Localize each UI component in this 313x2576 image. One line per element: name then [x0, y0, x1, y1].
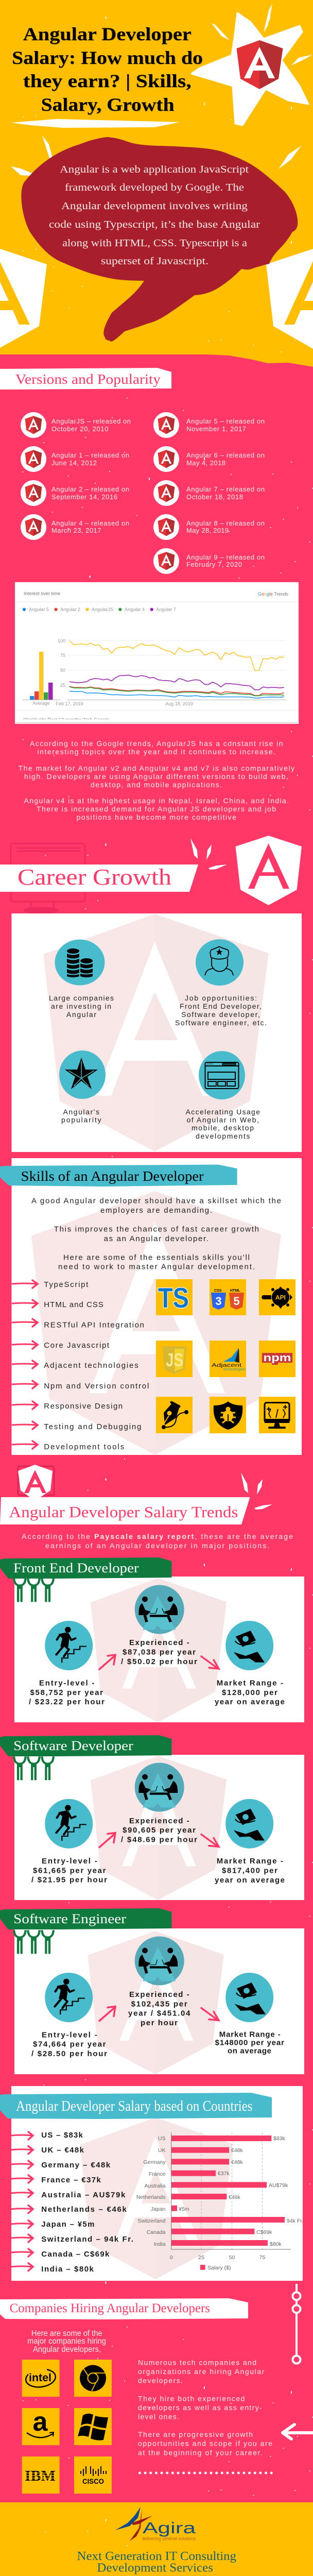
- heading: Versions and Popularity: [0, 368, 171, 389]
- icon tile: pen tool: [156, 1397, 193, 1433]
- text: job opportunities: [175, 994, 267, 1027]
- chart legend: Angular 7: [156, 607, 176, 612]
- chart: salary bars: 25: [198, 2255, 204, 2261]
- text: market range: Market Range -: [217, 1679, 283, 1688]
- chart: Google Trends interest over time: 50: [60, 668, 65, 673]
- icon: coins: [55, 940, 105, 985]
- intro paragraph: along with HTML, CSS. Typescript is a: [62, 238, 247, 249]
- skills intro text: This improves the chances of fast career growth: [54, 1225, 259, 1234]
- chart: Google Trends interest over time: Worldwide Past 12 months Web Search: [24, 717, 109, 723]
- icon: experienced meeting: [135, 1763, 184, 1811]
- panel: skills of an Angular developer: [0, 1158, 302, 1455]
- text: companies description: developers.: [138, 2377, 183, 2385]
- text block: Google trends summary: desktop, and mobile applications.: [91, 781, 222, 789]
- version: Angular 8: [153, 514, 265, 540]
- logo: Agira: Agira: [143, 2519, 196, 2537]
- skills list with arrows: RESTful API Integration: [44, 1321, 144, 1330]
- text block: Google trends summary: positions have become more competitive: [76, 813, 236, 821]
- icon tile: bug shield: [210, 1397, 246, 1433]
- version: Angular 7: Angular 7 – released on: [186, 485, 265, 493]
- watermark shield: [91, 1756, 227, 1900]
- chart legend: Angular 4: [125, 607, 145, 612]
- icon tile: CSS and HTML: CSS: [214, 1289, 222, 1293]
- panel: Front End Developer: [0, 1557, 304, 1722]
- text: market range: year on average: [215, 1876, 285, 1885]
- side white Angular shield right: [266, 249, 313, 349]
- icon tile: Adjacent technologies: technologies: [223, 1368, 246, 1371]
- panel: Software Developer: [0, 1735, 304, 1900]
- chart: salary bars: ¥5m: [178, 2206, 189, 2212]
- salary trends intro text: earnings of an Angular developer in major positions.: [45, 1541, 270, 1550]
- watermark shield: [80, 2117, 233, 2279]
- version: Angular 2: September 14, 2016: [51, 493, 117, 501]
- text: major companies intro: Angular developers,: [33, 2345, 101, 2354]
- heading band: Software Engineer: [13, 1911, 126, 1926]
- watermark shield: [31, 1191, 281, 1455]
- text: major companies intro: major companies hiring: [27, 2337, 106, 2346]
- heading: skills: Skills of an Angular Developer: [21, 1168, 204, 1184]
- yellow footer background: [0, 2502, 313, 2576]
- chart: Google Trends interest over time: 25: [60, 683, 65, 688]
- text: companies description: Numerous tech companies and: [138, 2359, 256, 2367]
- icon tile: CSS and HTML: 5: [233, 1295, 240, 1308]
- country salary list: Germany – €48k: [41, 2161, 111, 2170]
- country salary list: Netherlands – €46k: [41, 2205, 127, 2214]
- text: experienced: per hour: [141, 2019, 178, 2027]
- icon tile: Adjacent technologies: [210, 1341, 246, 1377]
- icon: Angular shield with sketch: [18, 1465, 54, 1501]
- icon tile: npm: npm: [264, 1352, 291, 1364]
- text: experienced: $87,038 per year: [123, 1648, 196, 1657]
- title: Salary, Growth: [41, 94, 174, 115]
- title underline brush stroke: [11, 119, 180, 128]
- text: market range: [215, 1679, 285, 1706]
- arrow pointing to company text: [283, 2425, 313, 2439]
- text: companies description: opportunities and scope if you are: [138, 2439, 272, 2448]
- chart: salary bars: [136, 2132, 303, 2271]
- version: Angular 2: [21, 480, 129, 506]
- logo tile: Windows: [74, 2408, 112, 2445]
- icon: three people: [14, 1578, 54, 1602]
- chart: salary bars: 50: [229, 2255, 235, 2261]
- country salary list: [11, 2131, 133, 2274]
- chart: salary bars: Germany: [143, 2159, 166, 2165]
- logo tile: Amazon: [22, 2407, 60, 2445]
- icon tile: CSS and HTML: HTML: [230, 1289, 240, 1293]
- text: large companies: are investing in: [51, 1002, 111, 1010]
- chart: salary bars: Switzerland: [137, 2218, 166, 2224]
- icon tile: CSS and HTML: [210, 1279, 246, 1315]
- icon: white Angular shield: [236, 836, 302, 905]
- icon: experienced meeting: [135, 1936, 184, 1986]
- icon tile: code monitor: [259, 1397, 295, 1433]
- heading band: [0, 2093, 272, 2119]
- white brush accents: [11, 4, 312, 176]
- text: popularity: popularity: [61, 1116, 101, 1124]
- skills list with arrows: Core Javascript: [44, 1341, 110, 1350]
- intro paragraph: code using Typescript, it’s the base Angular: [49, 219, 260, 230]
- chart: salary bars: Netherlands: [136, 2194, 166, 2200]
- arrow: up: [99, 1833, 115, 1848]
- text: large companies: Angular: [66, 1010, 96, 1019]
- text: experienced: Experienced -: [129, 1990, 189, 1999]
- text block: Google trends summary: According to the Google trends, AngularJS has a constant rise in: [30, 739, 283, 748]
- logo tile: Intel: [22, 2360, 60, 2397]
- chart: Google Trends interest over time: Average: [32, 701, 50, 706]
- version: Angular 9: February 7, 2020: [186, 561, 242, 568]
- text: market range: Market Range -: [217, 1857, 283, 1866]
- chart: salary bars: 0: [170, 2255, 173, 2261]
- icon tile: npm: [259, 1341, 295, 1377]
- text: market range: Market Range -: [219, 2030, 281, 2039]
- text block: Google trends summary: [19, 739, 294, 821]
- heading: Companies Hiring Angular Developers: Companies Hiring Angular Developers: [10, 2301, 210, 2315]
- skills list with arrows: [12, 1280, 149, 1451]
- top yellow background: [0, 0, 313, 355]
- heading: skills: [0, 1164, 237, 1187]
- version: Angular 6: May 4, 2018: [186, 459, 225, 467]
- text: accelerating usage: of Angular in Web,: [186, 1116, 259, 1124]
- skills list with arrows: TypeScript: [44, 1280, 89, 1289]
- intro paragraph: Angular is a web application JavaScript: [60, 164, 249, 175]
- version: Angular 7: [153, 480, 265, 506]
- salary trends intro text: According to the Payscale salary report, these are the average: [22, 1532, 293, 1540]
- version: Angular 9: Angular 9 – released on: [186, 553, 265, 561]
- text: experienced: [128, 1990, 190, 2027]
- arrow: down: [201, 1834, 219, 1846]
- text: entry level: [31, 1857, 107, 1885]
- title: they earn? | Skills,: [23, 71, 192, 91]
- text: companies description: organizations are hiring Angular: [138, 2367, 265, 2376]
- text: experienced: Experienced -: [129, 1638, 189, 1647]
- panel: Software Engineer: [0, 1908, 304, 2074]
- skills intro text: as an Angular developer.: [104, 1234, 208, 1243]
- text: entry level: / $21.95 per hour: [31, 1876, 107, 1885]
- logo tile: Cisco: CISCO: [82, 2477, 104, 2485]
- chart: salary bars: Canada: [147, 2229, 166, 2235]
- title: Angular Developer: [23, 24, 192, 44]
- heading band: [0, 1735, 172, 1756]
- text block: Google trends summary: high. Developers are using Angular different versions to build web,: [24, 772, 288, 781]
- text block: Google trends summary: The market for Angular v2 and Angular v4 and v7 is also comparatively: [19, 764, 294, 772]
- text: market range: $817,400 per: [222, 1867, 277, 1875]
- chart: Google Trends interest over time: Interest over time: [24, 591, 60, 597]
- version: Angular 1: Angular 1 – released on: [51, 451, 129, 459]
- icon tile: API: API: [275, 1294, 286, 1301]
- text: popularity: [61, 1108, 101, 1124]
- skills list with arrows: Responsive Design: [44, 1402, 123, 1411]
- version: Angular 4: March 23, 2017: [51, 527, 101, 534]
- text: market range: year on average: [215, 1698, 285, 1706]
- text: market range: [215, 2030, 284, 2055]
- text: major companies intro: Here are some of the: [31, 2329, 102, 2338]
- chart: Google Trends interest over time: Google Trends: [258, 591, 288, 597]
- country salary list: Australia – AU$79k: [41, 2191, 126, 2199]
- arrow: up: [99, 1655, 115, 1669]
- text: accelerating usage: Accelerating Usage: [186, 1108, 260, 1116]
- text: entry level: $61,665 per year: [33, 1867, 106, 1875]
- text: accelerating usage: mobile, desktop: [192, 1124, 254, 1132]
- chart: Google Trends interest over time: [15, 582, 299, 724]
- watermark shield: [88, 1931, 224, 2074]
- skills intro text: [31, 1197, 281, 1272]
- text: accelerating usage: developments: [196, 1132, 250, 1140]
- icon tile: JavaScript: [156, 1341, 193, 1377]
- icon: Angular logo on white star: [192, 13, 308, 125]
- text: entry level: [29, 1679, 105, 1706]
- salary trends intro text: [22, 1532, 293, 1550]
- intro speech bubble: [21, 137, 298, 342]
- intro paragraph: superset of Javascript.: [101, 256, 208, 267]
- dotted line: [140, 2472, 272, 2474]
- version: AngularJS: [21, 412, 131, 438]
- skills intro text: A good Angular developer should have a skillset which the: [31, 1197, 281, 1206]
- icon: three people: [14, 1756, 54, 1780]
- heading band: [0, 1908, 172, 1929]
- text block: Google trends summary: There is increased demand for Angular JS developers and job: [37, 805, 276, 813]
- country salary list: India – $80k: [41, 2265, 94, 2274]
- text: entry level: Entry-level -: [39, 1679, 94, 1688]
- skills list with arrows: Adjacent technologies: [44, 1361, 138, 1370]
- text: market range: on average: [228, 2046, 271, 2055]
- text: companies description: at the beginning of your career.: [138, 2448, 263, 2456]
- chart: salary bars: €37k: [218, 2171, 230, 2177]
- text: large companies: [49, 994, 114, 1019]
- text block: Google trends summary: interesting topics over the year and it continues to increase.: [37, 748, 275, 756]
- version list: [21, 412, 265, 574]
- version: Angular 4: Angular 4 – released on: [51, 519, 129, 527]
- chart: salary bars: €46k: [229, 2194, 241, 2200]
- text: entry level: / $23.22 per hour: [29, 1698, 105, 1706]
- text: experienced: / $48.69 per hour: [121, 1835, 197, 1844]
- text: entry level: $74,664 per year: [33, 2040, 106, 2049]
- skills list with arrows: Testing and Debugging: [44, 1422, 141, 1431]
- version: Angular 8: Angular 8 – released on: [186, 519, 265, 527]
- logo: Agira: delivering sentinel solutions: [142, 2536, 196, 2541]
- version: Angular 2: Angular 2 – released on: [51, 485, 129, 493]
- version: Angular 4: [21, 514, 129, 540]
- country salary list: Japan – ¥5m: [41, 2220, 94, 2229]
- country salary list: France – €37k: [41, 2176, 101, 2184]
- decorative timeline with circles: [292, 2284, 301, 2364]
- skills list with arrows: HTML and CSS: [44, 1300, 103, 1309]
- logo tile: Intel: intel: [29, 2372, 51, 2384]
- footer tagline: Next Generation IT Consulting: [77, 2550, 236, 2563]
- chart: salary bars: France: [149, 2171, 166, 2177]
- logo tile: Chrome: [74, 2360, 112, 2397]
- footer tagline: Development Services: [97, 2562, 213, 2575]
- text: entry level: Entry-level -: [42, 2030, 97, 2039]
- icon: market money: [225, 1621, 273, 1670]
- text: large companies: Large companies: [49, 994, 114, 1002]
- chart: salary bars: India: [154, 2241, 166, 2247]
- text: experienced: year / $451.04: [128, 2009, 190, 2018]
- chart: salary bars: $83k: [273, 2136, 286, 2142]
- chart: salary bars: €48k: [231, 2147, 244, 2154]
- icon: entry level stairs: [45, 1799, 93, 1849]
- skills list with arrows: Development tools: [44, 1443, 124, 1451]
- country salary list: US – $83k: [41, 2131, 83, 2140]
- text: experienced: $90,605 per year: [123, 1826, 196, 1835]
- icon tile: API: [259, 1279, 295, 1315]
- sketch: computer monitor behind Career Growth: [11, 843, 85, 913]
- text: job opportunities: Software developer,: [181, 1010, 260, 1019]
- trend lines: [69, 641, 284, 698]
- watermark shield: [43, 914, 269, 1151]
- text: popularity: Angular's: [63, 1108, 99, 1116]
- country salary list: Canada – C$69k: [41, 2250, 110, 2259]
- heading: Career Growth: [0, 865, 198, 892]
- heading: Angular Developer Salary Trends: Angular Developer Salary Trends: [9, 1503, 238, 1521]
- logo tile: IBM: [22, 2456, 60, 2494]
- text: market range: $148000 per year: [215, 2038, 284, 2047]
- skills intro text: Here are some of the essentials skills you’ll: [63, 1253, 250, 1262]
- text: entry level: [31, 2030, 107, 2058]
- chart: Google Trends interest over time: 100: [58, 638, 65, 643]
- intro paragraph: Angular development involves writing: [61, 200, 248, 212]
- white brush accents: [190, 838, 227, 870]
- text: companies description: level ones.: [138, 2413, 179, 2421]
- text: job opportunities: Software engineer, etc.: [175, 1019, 267, 1027]
- icon tile: CSS and HTML: 3: [215, 1295, 222, 1308]
- chart legend: AngularJS: [92, 607, 113, 612]
- country salary list: UK – €48k: [41, 2146, 84, 2155]
- heading: Versions and Popularity: Versions and Popularity: [15, 371, 161, 387]
- version: Angular 6: Angular 6 – released on: [186, 451, 265, 459]
- title: Salary: How much do: [12, 47, 203, 68]
- text: entry level: Entry-level -: [42, 1857, 97, 1866]
- skills intro text: need to work to master Angular development.: [58, 1263, 255, 1272]
- text: entry level: / $28.50 per hour: [31, 2049, 107, 2058]
- average bars: [30, 652, 53, 700]
- footer tagline: [77, 2550, 236, 2575]
- white brush accents: [241, 1472, 272, 1510]
- heading band: Front End Developer: [13, 1561, 139, 1575]
- chart legend: Angular 5: [29, 607, 49, 612]
- heading band: Angular Developer Salary based on Countries: [16, 2098, 252, 2114]
- chart: salary bars: $80k: [270, 2241, 282, 2247]
- icon: entry level stairs: [45, 1621, 93, 1670]
- heading band: [0, 1557, 172, 1579]
- chart: Google Trends interest over time: Feb 17, 2019: [56, 701, 83, 706]
- brush edge of yellow into pink: [207, 354, 313, 367]
- side white Angular shield left: [0, 249, 47, 348]
- icon: market money: [225, 1799, 273, 1849]
- icon tile: TypeScript: TS: [158, 1282, 189, 1314]
- text: experienced: Experienced -: [129, 1817, 189, 1825]
- logo tile: Cisco: [74, 2456, 112, 2494]
- text: companies description: [138, 2359, 272, 2456]
- arrow: down: [201, 1656, 219, 1669]
- icon tile: Adjacent technologies: Adjacent: [212, 1363, 241, 1368]
- heading: Companies Hiring Angular Developers: [0, 2298, 248, 2319]
- text: experienced: $102,435 per: [131, 1999, 187, 2008]
- version: Angular 8: May 28, 2019: [186, 527, 229, 534]
- icon: officer: [196, 939, 244, 986]
- chart: salary bars: €48k: [231, 2159, 244, 2165]
- chart: salary bars: 75: [259, 2255, 265, 2261]
- text: companies description: developers as well as ass entry-: [138, 2403, 262, 2412]
- chart: Google Trends interest over time: Aug 18, 2019: [165, 701, 193, 706]
- version: Angular 5: November 1, 2017: [186, 425, 246, 433]
- heading: Angular Developer Salary Trends: [0, 1497, 250, 1524]
- text: companies description: There are progressive growth: [138, 2430, 253, 2438]
- chart: salary bars: C$69k: [256, 2229, 272, 2235]
- country salary list: Switzerland – 94k Fr.: [41, 2235, 133, 2244]
- icon: market money: [225, 1973, 273, 2022]
- text: job opportunities: Front End Developer,: [180, 1002, 262, 1010]
- chart: salary bars: US: [158, 2136, 166, 2142]
- icon tile: JavaScript: JS: [166, 1349, 183, 1370]
- chart legend: [23, 607, 176, 612]
- text: experienced: [121, 1817, 197, 1844]
- panel: career growth: [11, 913, 302, 1152]
- chart legend: Angular 2: [60, 607, 80, 612]
- panel: salary by country: [0, 2086, 303, 2281]
- text: accelerating usage: [186, 1108, 260, 1140]
- text: market range: [215, 1857, 285, 1885]
- intro paragraph: [49, 164, 260, 267]
- text: entry level: $58,752 per year: [30, 1688, 103, 1697]
- chart: Google Trends interest over time: 75: [60, 653, 65, 658]
- icon: nautical star: [59, 1050, 106, 1099]
- version: Angular 7: October 18, 2018: [186, 493, 243, 501]
- skills intro text: employers are demanding.: [100, 1206, 212, 1215]
- icon: entry level stairs: [45, 1973, 93, 2022]
- chart legend: Salary ($): [207, 2265, 231, 2271]
- arrow: down: [201, 2008, 219, 2021]
- text: experienced: / $50.02 per hour: [121, 1657, 197, 1666]
- logo tile: Amazon: a: [33, 2407, 48, 2437]
- version: Angular 1: June 14, 2012: [51, 459, 97, 467]
- logo tile: IBM: IBM: [25, 2468, 56, 2484]
- icon: browser window: [199, 1051, 245, 1099]
- icon: experienced meeting: [135, 1585, 184, 1634]
- chart: salary bars: Japan: [151, 2206, 166, 2212]
- title: [12, 24, 203, 115]
- heading: Career Growth: Career Growth: [18, 865, 171, 890]
- icon: three people: [14, 1930, 54, 1954]
- version: Angular 5: Angular 5 – released on: [186, 417, 265, 425]
- watermark shield: [91, 1578, 227, 1722]
- version: AngularJS: AngularJS – released on: [51, 417, 131, 425]
- version: AngularJS: October 20, 2010: [51, 425, 108, 433]
- intro paragraph: framework developed by Google. The: [65, 182, 244, 193]
- version: Angular 5: [153, 412, 265, 438]
- chart: salary bars: 94k Fr.: [287, 2218, 303, 2224]
- version: Angular 6: [153, 446, 265, 472]
- text: job opportunities: Job opportunities:: [185, 994, 257, 1002]
- text: major companies intro: [27, 2329, 106, 2354]
- text: market range: $128,000 per: [222, 1688, 277, 1697]
- heading band: Software Developer: [13, 1738, 133, 1753]
- chart: salary bars: Australia: [145, 2183, 166, 2189]
- logo: Agira: [115, 2507, 196, 2541]
- text: experienced: [121, 1638, 197, 1666]
- chart: salary bars: UK: [158, 2147, 166, 2154]
- text block: Google trends summary: Angular v4 is at the highest usage in Nepal, Israel, China, and India.: [24, 796, 289, 805]
- skills list with arrows: Npm and Version control: [44, 1382, 149, 1391]
- text: companies description: They hire both experienced: [138, 2395, 245, 2403]
- version: Angular 9: [153, 548, 265, 574]
- version: Angular 1: [21, 446, 129, 472]
- arrow: up: [99, 2006, 115, 2021]
- chart: salary bars: AU$79k: [269, 2182, 288, 2189]
